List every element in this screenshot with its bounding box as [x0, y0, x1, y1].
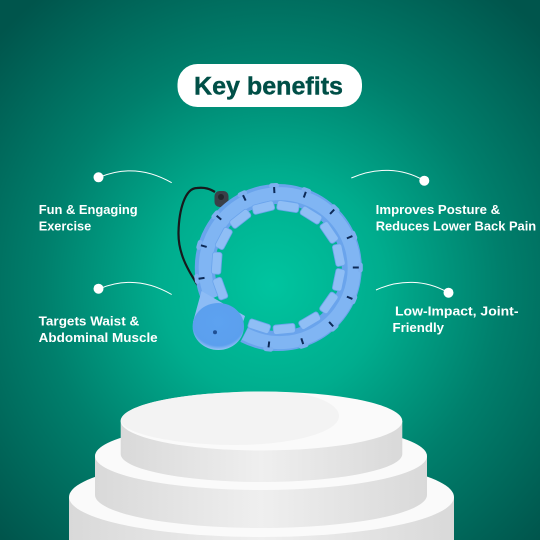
callout: improves posture: Improves Posture & — [376, 202, 500, 217]
podium — [69, 392, 454, 540]
callout: fun and engaging — [39, 171, 172, 234]
callout: targets waist: Abdominal Muscle — [39, 330, 158, 345]
callout: improves posture — [351, 170, 536, 234]
top tier — [121, 392, 402, 482]
callout: fun and engaging: Exercise — [39, 219, 91, 234]
hoop dark dividers — [198, 187, 359, 348]
hula hoop product — [178, 183, 363, 352]
hoop joint clips — [194, 183, 363, 352]
callout: targets waist — [39, 282, 172, 345]
title pill: Key benefits — [194, 72, 343, 100]
callout: targets waist: Targets Waist & — [39, 314, 139, 329]
title pill — [178, 64, 362, 107]
callout: improves posture: Reduces Lower Back Pain — [376, 219, 536, 234]
middle tier — [95, 422, 427, 528]
hoop inner pads — [211, 200, 346, 335]
weighted ball — [193, 291, 245, 350]
cord knob — [214, 191, 228, 207]
cord — [178, 188, 215, 291]
hoop tube — [205, 194, 354, 343]
callout: fun and engaging: Fun & Engaging — [39, 202, 138, 217]
callout: low impact: Low-Impact, Joint- — [395, 303, 518, 318]
bottom tier — [69, 457, 454, 540]
callout: low impact — [376, 282, 518, 335]
callout: low impact: Friendly — [392, 320, 445, 335]
